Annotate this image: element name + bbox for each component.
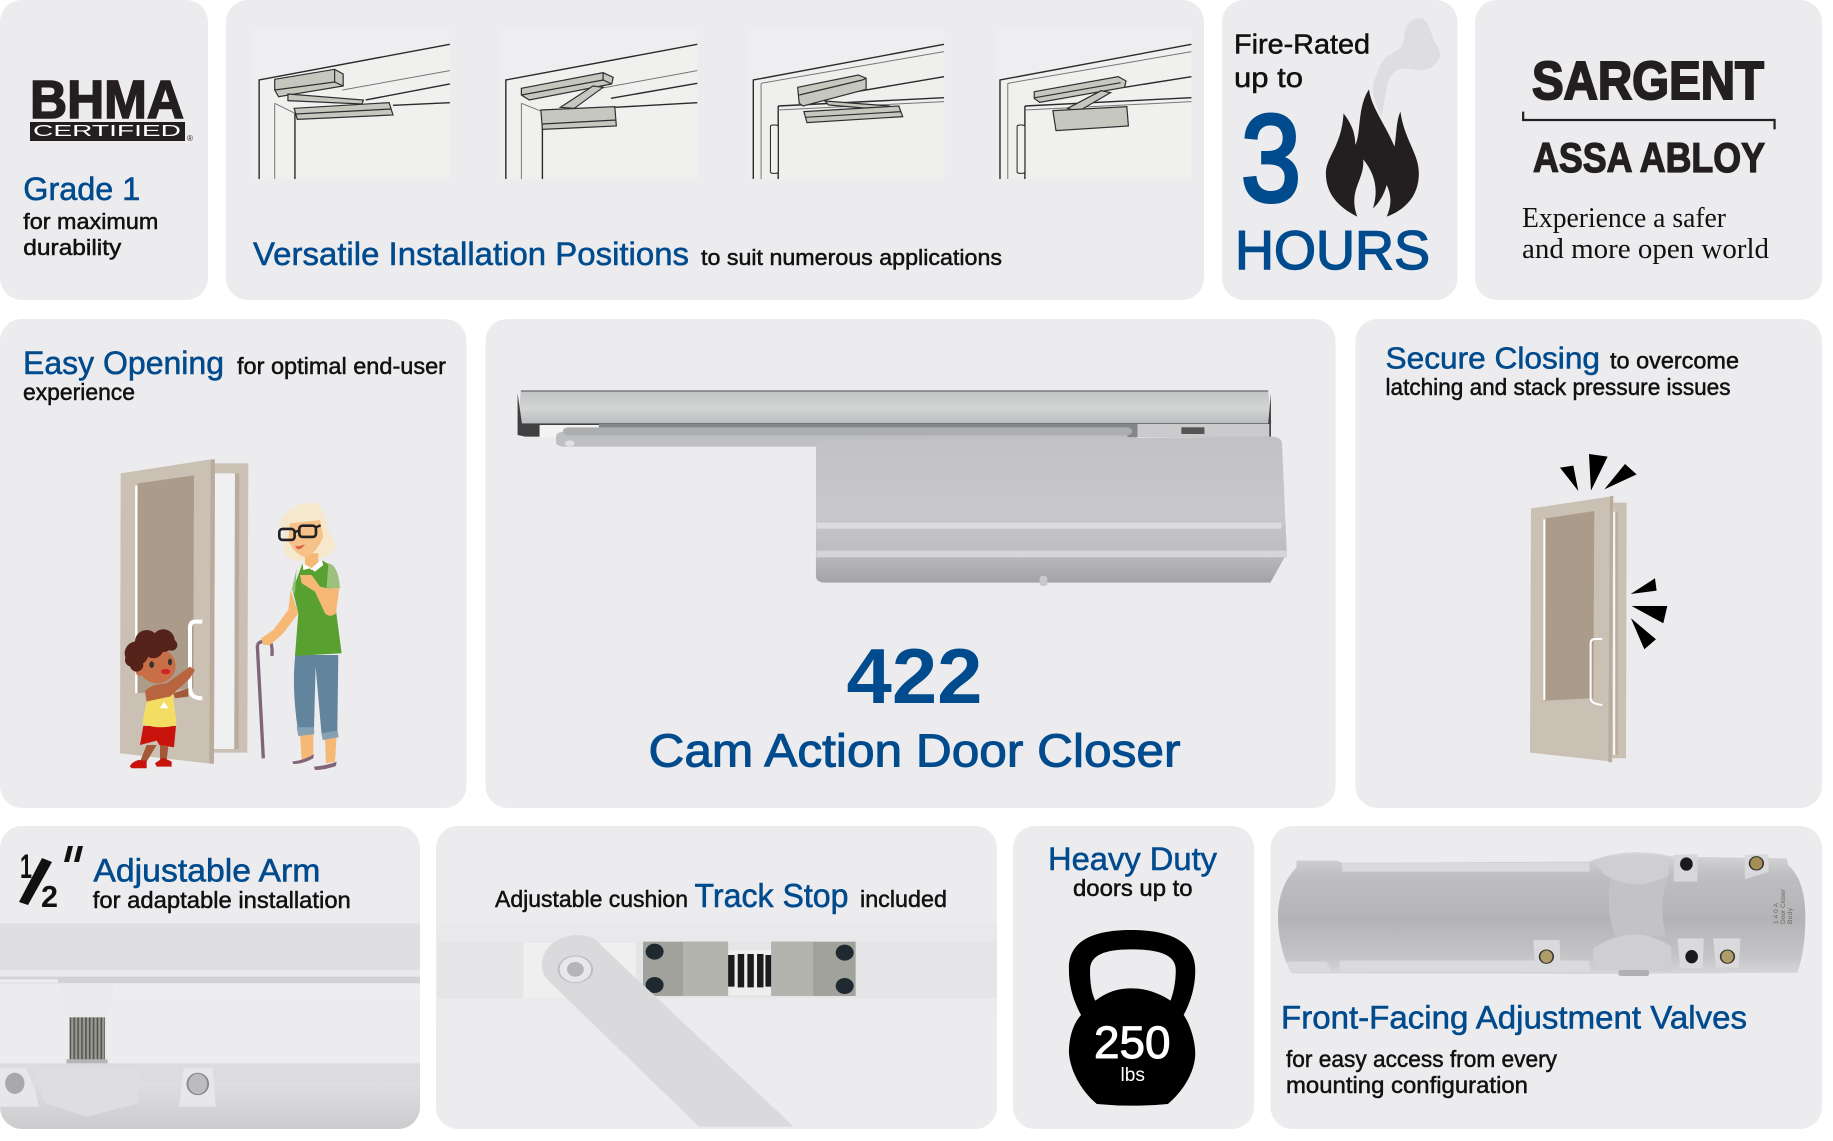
tagline: and more open world (1522, 234, 1769, 265)
closer cover (816, 437, 1287, 586)
heading: Easy Opening: Easy Opening (23, 345, 224, 381)
arm (556, 432, 1128, 447)
icon: one-half inch: 1 (20, 848, 32, 886)
panel: Front-Facing Adjustment Valves (1270, 826, 1822, 1129)
illustration: installation position 2 (502, 28, 697, 179)
heading: Front-Facing Adjustment Valves: Front-Facing Adjustment Valves (1281, 1000, 1747, 1036)
casting label: 140A (1773, 902, 1780, 924)
icon: impact marks (1560, 454, 1667, 649)
heading: Secure Closing: Secure Closing (1386, 340, 1600, 376)
text: Fire-Rated up to: up to (1234, 62, 1303, 93)
text: for easy access from every mounting configuration (1286, 1046, 1557, 1098)
text: for easy access from every mounting configuration: mounting configuration (1286, 1072, 1528, 1098)
text: to overcome latching and stack pressure issues: latching and stack pressure issues (1386, 374, 1730, 400)
casting label: Body (1787, 907, 1794, 924)
panel: 422 Cam Action Door Closer (486, 319, 1336, 808)
icon: one-half inch (19, 846, 83, 914)
panel: Sargent Assa Abloy (1475, 0, 1822, 300)
text: for optimal end-user experience (23, 353, 446, 405)
text: to overcome latching and stack pressure issues (1386, 348, 1739, 400)
heading: Heavy Duty: Heavy Duty (1048, 841, 1217, 877)
text: for optimal end-user experience: for optimal end-user (237, 353, 446, 379)
icon: smoke (1373, 18, 1440, 117)
text: for maximum durability: for maximum (23, 209, 158, 234)
illustration: installation position 1 (253, 28, 450, 179)
panel: Secure Closing (1356, 319, 1822, 808)
logo: SARGENT: SARGENT (1532, 51, 1764, 111)
heading: Versatile Installation Positions: Versatile Installation Positions (253, 236, 689, 272)
casting label: Door Closer (1780, 888, 1787, 924)
illustration: installation position 4 (995, 28, 1191, 179)
heading: HOURS: HOURS (1235, 219, 1430, 281)
number: 250 lbs: lbs (1120, 1065, 1145, 1086)
panel: Adjustable Arm (0, 826, 420, 1130)
panel: BHMA Grade 1 (0, 0, 208, 300)
casting label (1773, 888, 1794, 924)
illustration: grandmother with cane (257, 503, 342, 770)
logo: BHMA certified: BHMA (30, 70, 184, 130)
icon: flame (1326, 89, 1419, 217)
icon: kettlebell (1069, 930, 1195, 1106)
track (518, 391, 1271, 437)
photo: arm and spindle (0, 923, 420, 1130)
illustration: installation position 3 (749, 28, 945, 179)
heading: Grade 1: Grade 1 (23, 171, 140, 207)
panel: Easy Opening (0, 319, 466, 808)
text: Fire-Rated up to (1234, 28, 1370, 93)
text: for adaptable installation: for adaptable installation (93, 887, 351, 913)
icon: one-half inch: 2 (41, 879, 58, 914)
tagline: Experience a safer (1522, 203, 1727, 234)
text: to overcome latching and stack pressure issues: to overcome (1610, 348, 1739, 374)
number: 422: 422 (846, 632, 982, 720)
logo: ASSA ABLOY: ASSA ABLOY (1533, 134, 1765, 181)
logo: BHMA certified: ® (187, 134, 193, 143)
tagline (1522, 203, 1769, 265)
photo: track stop (542, 935, 856, 1126)
text: for easy access from every mounting configuration: for easy access from every (1286, 1046, 1557, 1072)
text: Fire-Rated up to: Fire-Rated (1234, 28, 1370, 60)
text: doors up to: doors up to (1073, 875, 1193, 901)
panel: Heavy Duty (1013, 826, 1254, 1129)
logo: BHMA certified: CERTIFIED (33, 123, 181, 140)
panel: Fire-Rated 3 hours (1222, 0, 1458, 300)
heading: Cam Action Door Closer: Cam Action Door Closer (648, 724, 1180, 776)
logo bracket (1523, 112, 1775, 129)
text: Adjustable cushion Track Stop included: included (860, 886, 947, 912)
text: Adjustable cushion Track Stop included (495, 877, 947, 914)
text: Adjustable cushion Track Stop included: Adjustable cushion (495, 886, 688, 912)
photo: door closer (518, 391, 1287, 586)
text: for maximum durability (23, 209, 158, 260)
number: 3: 3 (1241, 91, 1301, 228)
text: to suit numerous applications: to suit numerous applications (701, 245, 1002, 270)
panel: Track Stop (436, 826, 997, 1129)
heading: Adjustable Arm: Adjustable Arm (93, 852, 320, 888)
panel: Versatile Installation Positions (226, 0, 1204, 300)
number: 250 lbs: 250 (1094, 1017, 1170, 1068)
illustration: child (125, 629, 195, 768)
illustration: open door (120, 459, 248, 764)
illustration: closed door (1530, 496, 1627, 763)
text: for maximum durability: durability (23, 235, 121, 260)
photo: closer body casting (1278, 852, 1805, 976)
text: for optimal end-user experience: experience (23, 379, 135, 405)
text: Adjustable cushion Track Stop included: Track Stop (694, 877, 848, 914)
